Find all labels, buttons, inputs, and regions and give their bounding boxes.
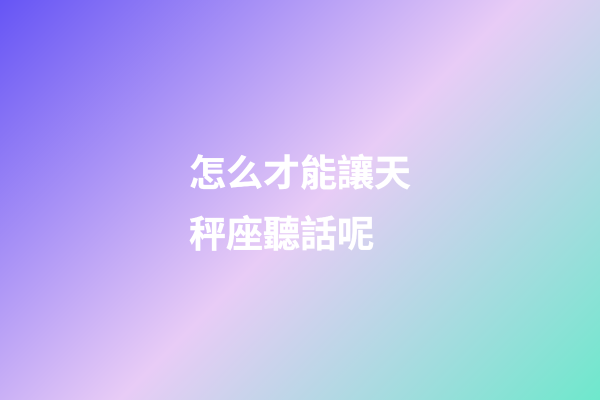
title bbox=[189, 153, 411, 255]
title: 秤座聽話呢 bbox=[189, 214, 374, 255]
title: 怎么才能讓天 bbox=[189, 153, 411, 194]
